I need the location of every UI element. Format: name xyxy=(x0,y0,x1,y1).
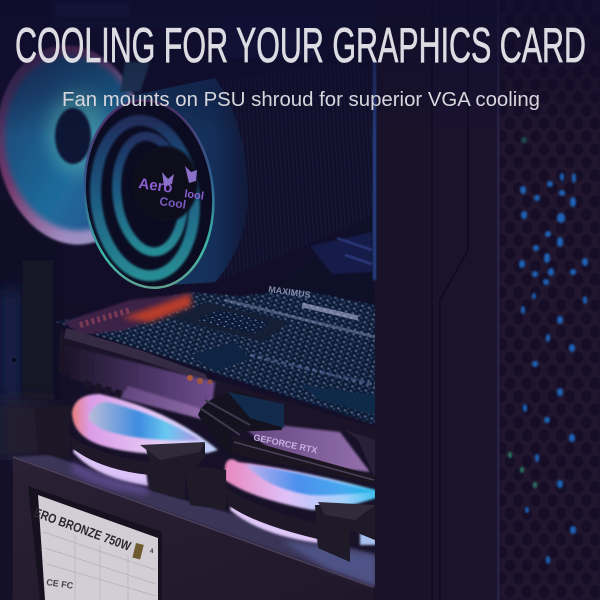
panel: top text scrim xyxy=(0,0,600,135)
red lit PCB area xyxy=(64,293,194,335)
panel: bottom left dark edge xyxy=(0,460,12,600)
ring xyxy=(225,459,376,510)
panel: right bottom RGB fan xyxy=(225,459,376,545)
panel: fan brackets xyxy=(140,442,375,562)
panel: case interior frame xyxy=(0,0,380,460)
panel: shroud xyxy=(13,455,376,600)
logo text xyxy=(137,175,205,212)
panel: case front xyxy=(373,0,600,600)
panel: GeForce card plate xyxy=(235,420,375,478)
sticker title: ERO BRONZE 750W xyxy=(32,505,134,554)
lower glow xyxy=(230,498,318,543)
fan hub xyxy=(55,108,91,164)
panel: PSU sticker: 4 xyxy=(150,549,154,555)
pump head face xyxy=(76,94,222,294)
lower glow xyxy=(73,445,148,486)
band xyxy=(70,436,150,475)
lens xyxy=(246,464,375,495)
logo hub xyxy=(132,146,198,222)
panel: graphics card PCB xyxy=(56,284,376,440)
subtitle: Fan mounts on PSU shroud for superior VGA cooling xyxy=(62,89,540,111)
band xyxy=(225,487,345,545)
bracket xyxy=(34,405,70,460)
mesh lights xyxy=(508,137,588,564)
lens xyxy=(88,402,200,440)
logo text: lool xyxy=(184,188,205,203)
logo icons xyxy=(162,166,197,186)
sticker table xyxy=(43,532,156,600)
panel: rear RGB fan xyxy=(0,36,160,254)
motherboard text: MAXIMUS xyxy=(268,284,311,300)
panel: left bottom RGB fan xyxy=(34,394,218,495)
panel: PCIe power cable xyxy=(198,392,375,484)
mesh xyxy=(500,0,600,600)
panel: GeForce card plate: GEFORCE RTX xyxy=(253,432,318,455)
sticker marks: CE FC xyxy=(46,577,74,591)
logo text: Cool xyxy=(159,194,187,212)
ring xyxy=(72,394,218,454)
panel: PSU sticker xyxy=(28,486,162,600)
sticker badge xyxy=(132,543,144,559)
panel: AIO pump radiator cylinder xyxy=(76,62,372,294)
logo digits xyxy=(84,380,122,399)
GPU edge xyxy=(58,330,375,440)
logo text: Aero xyxy=(137,175,174,197)
panel: motherboard heatsinks xyxy=(250,215,372,300)
